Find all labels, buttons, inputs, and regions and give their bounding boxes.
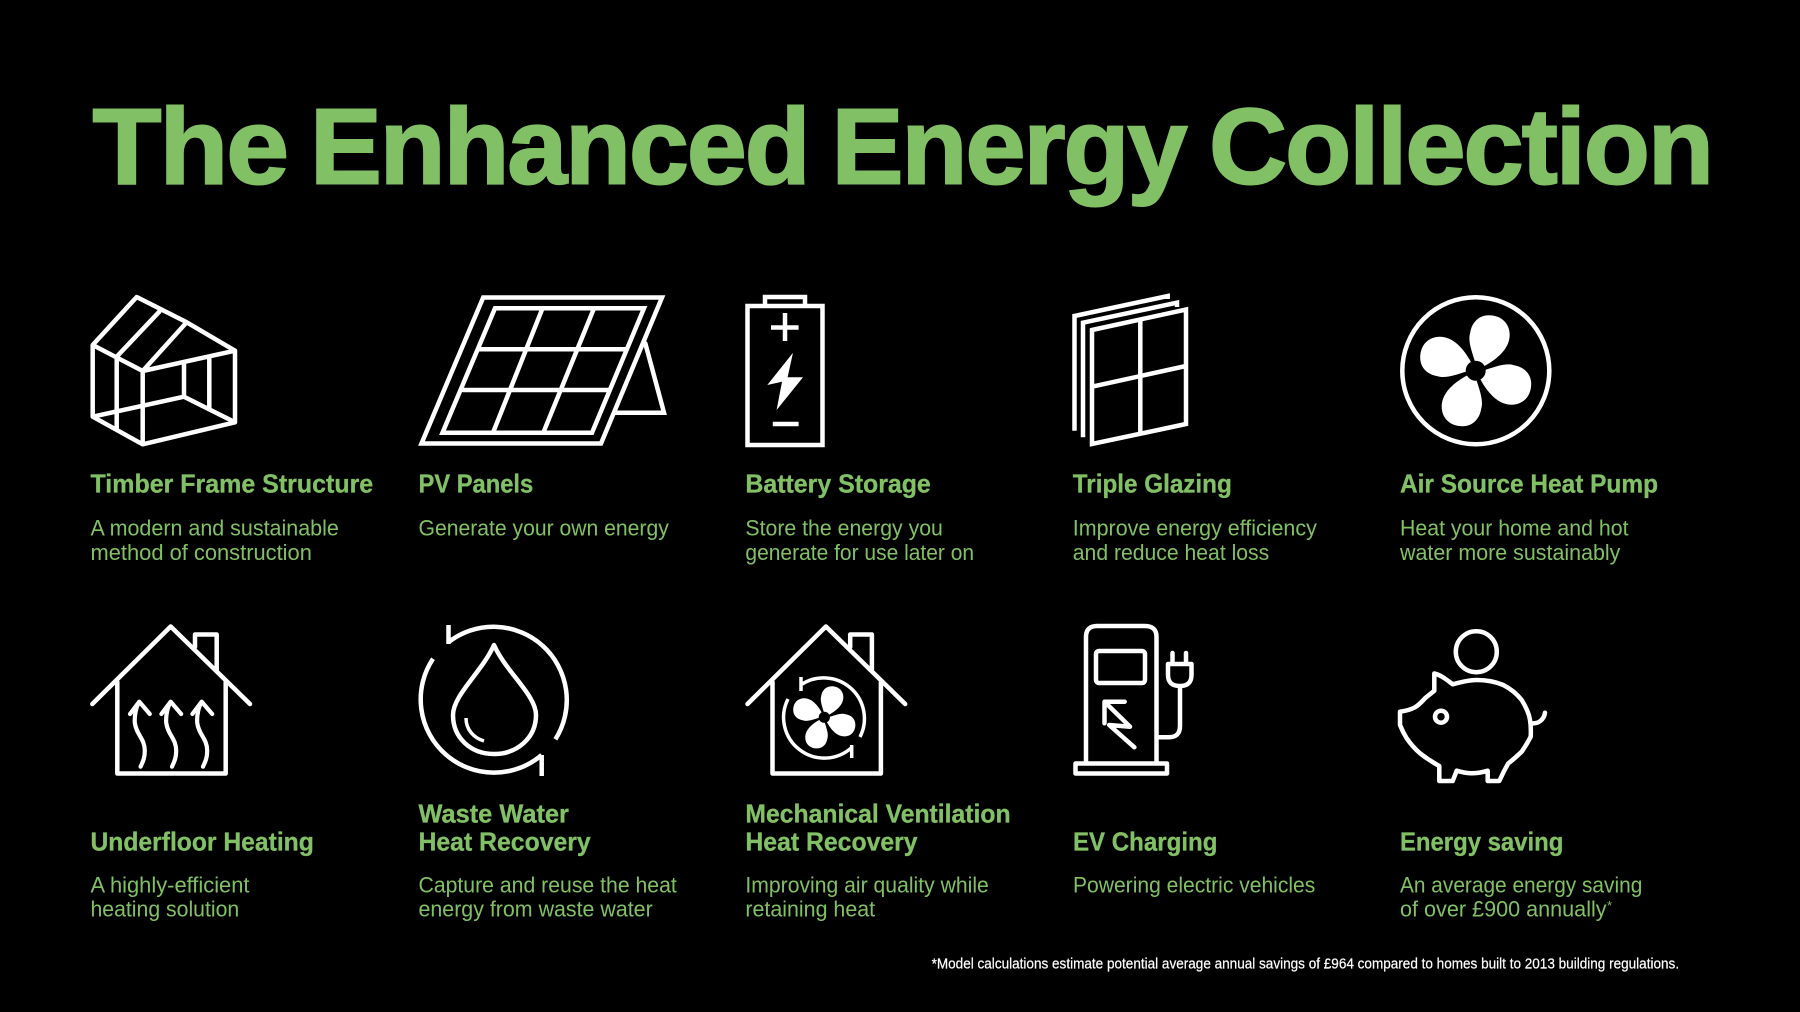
heading: Heat Recovery <box>745 827 918 857</box>
description: energy from waste water <box>418 897 653 922</box>
description: and reduce heat loss <box>1073 540 1269 565</box>
heading: Energy saving <box>1400 827 1563 857</box>
description <box>418 872 677 922</box>
heading: PV Panels <box>418 469 533 499</box>
description: An average energy saving <box>1400 872 1642 897</box>
panel: Triple Glazing <box>1073 296 1317 565</box>
heading: Timber Frame Structure <box>90 469 373 499</box>
icon: EV charger <box>1076 626 1192 774</box>
heading: Underfloor Heating <box>90 827 314 857</box>
description <box>745 872 989 922</box>
footnote: *Model calculations estimate potential average annual savings of £964 compared to homes built to 2013 building regulations. <box>932 956 1679 972</box>
heading: Mechanical Ventilation <box>745 799 1011 829</box>
title: Energy <box>832 86 1187 206</box>
panel: Air Source Heat Pump <box>1399 297 1658 565</box>
description: generate for use later on <box>745 540 974 565</box>
description: Heat your home and hot <box>1400 516 1628 541</box>
title: Collection <box>1209 86 1712 206</box>
icon: triple glazed window <box>1074 296 1186 444</box>
description <box>90 516 339 565</box>
heading: Waste Water <box>418 799 569 829</box>
description <box>745 516 974 565</box>
description: Generate your own energy <box>418 516 669 541</box>
description <box>90 872 250 922</box>
icon: solar panel <box>422 298 664 444</box>
description: Improving air quality while <box>745 872 989 897</box>
heading <box>418 799 591 857</box>
icon: timber frame <box>93 297 235 444</box>
heading: Triple Glazing <box>1073 469 1232 499</box>
description: retaining heat <box>745 897 875 922</box>
description <box>1399 516 1628 565</box>
title: Enhanced <box>310 86 808 206</box>
description: of over £900 annually <box>1400 897 1607 922</box>
panel: EV Charging <box>1073 626 1315 897</box>
panel: Underfloor Heating <box>90 626 314 922</box>
icon: recycled water drop <box>421 625 567 776</box>
icon: battery <box>748 297 822 445</box>
icon: house with heat arrows <box>92 626 250 774</box>
description: A modern and sustainable <box>90 516 339 541</box>
description: water more sustainably <box>1399 540 1620 565</box>
panel: PV Panels <box>418 298 669 541</box>
description: Powering electric vehicles <box>1073 872 1315 897</box>
heading: Battery Storage <box>745 469 931 499</box>
heading <box>745 799 1011 857</box>
heading: Air Source Heat Pump <box>1400 469 1658 499</box>
panel: Waste Water Heat Recovery <box>418 625 677 922</box>
panel: Battery Storage <box>745 297 974 565</box>
description: * <box>1607 898 1612 913</box>
icon: fan <box>1402 297 1549 444</box>
panel: Timber Frame Structure <box>90 297 373 565</box>
description <box>1400 872 1642 922</box>
description: heating solution <box>90 897 239 922</box>
description: Improve energy efficiency <box>1073 516 1317 541</box>
panel: Energy saving <box>1400 631 1642 922</box>
panel: Mechanical Ventilation Heat Recovery <box>745 626 1011 922</box>
heading: EV Charging <box>1073 827 1217 857</box>
icon: piggy bank and coin <box>1400 631 1545 781</box>
title: The <box>92 86 287 206</box>
icon: house with fan <box>748 626 905 774</box>
heading: Heat Recovery <box>418 827 591 857</box>
title <box>92 86 1712 206</box>
description: method of construction <box>90 540 312 565</box>
description: Capture and reuse the heat <box>418 872 677 897</box>
description: A highly-efficient <box>90 872 250 897</box>
description: Store the energy you <box>745 516 943 541</box>
description <box>1073 516 1317 565</box>
